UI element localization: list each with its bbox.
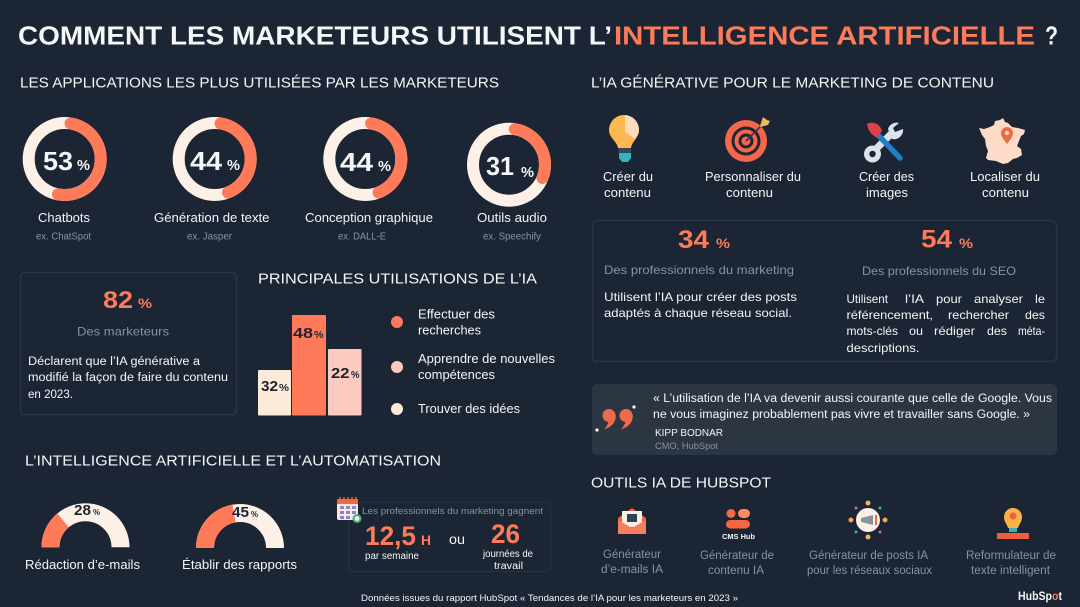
- item: localiser du contenu: Localiser du: [970, 170, 1040, 184]
- panel: statistiques 34% et 54%: des: [987, 324, 1007, 338]
- panel: temps gagné: Les professionnels du marketing gagnent: [362, 506, 543, 517]
- gauge: rédaction d'e-mails 28%: %: [93, 507, 100, 517]
- donut: chatbots 53%: %: [77, 157, 90, 174]
- panel: statistiques 34% et 54%: rechercher: [948, 308, 1009, 322]
- panel: statistiques 34% et 54%: 54: [921, 226, 952, 254]
- donut: génération de texte 44%: 44: [190, 146, 223, 176]
- bar chart: %: [279, 383, 289, 394]
- tool: générateur de contenu: [700, 509, 774, 577]
- heading: automatisation: L’INTELLIGENCE ARTIFICIELLE ET L’AUTOMATISATION: [25, 452, 441, 470]
- donut: outils audio 31%: %: [521, 164, 534, 181]
- icon: france map with pin: [979, 118, 1025, 164]
- panel: statistiques 34% et 54%: descriptions.: [846, 341, 920, 355]
- logo: HubSpot: HubSpot: [1018, 591, 1062, 603]
- icon: CMS Hub logo: CMS Hub: [722, 534, 755, 541]
- panel: citation: ne vous imaginez probablement pas vivre et travailler sans Google. »: [653, 409, 1030, 421]
- donut: chatbots 53%: 53: [43, 146, 73, 176]
- heading: applications: LES APPLICATIONS LES PLUS UTILISÉES PAR LES MARKETEURS: [20, 74, 499, 92]
- panel: statistiques 34% et 54%: %: [959, 235, 974, 251]
- panel: temps gagné: journées de: [482, 549, 533, 560]
- panel: citation: KIPP BODNAR: [655, 428, 723, 439]
- donut: outils audio 31%: [473, 129, 547, 242]
- item: personnaliser du contenu: Personnaliser du: [705, 170, 801, 184]
- panel: statistiques 34% et 54%: pour: [936, 292, 962, 306]
- legend: compétences: [418, 368, 495, 382]
- tool: générateur de contenu: contenu IA: [708, 565, 764, 577]
- donut: conception graphique 44%: %: [378, 158, 391, 175]
- item: créer du contenu: contenu: [604, 186, 651, 200]
- tool: générateur d'e-mails: [601, 508, 663, 576]
- gauge: établir des rapports 45%: 45: [232, 505, 249, 521]
- icon: social network hub: [848, 500, 888, 540]
- tool: générateur de posts: pour les réseaux sociaux: [807, 565, 932, 577]
- gauge: établir des rapports 45%: [182, 505, 297, 572]
- gauge: établir des rapports 45%: Établir des rapports: [182, 557, 297, 572]
- panel: statistiques 34% et 54%: Utilisent l’IA pour créer des posts: [604, 290, 797, 304]
- tool: générateur de posts: Générateur de posts IA: [809, 550, 928, 562]
- panel: statistiques 34% et 54%: rédiger: [934, 324, 975, 338]
- donut: outils audio 31%: ex. Speechify: [483, 232, 541, 242]
- donut: génération de texte 44%: %: [227, 157, 240, 174]
- tool: reformulateur: texte intelligent: [971, 565, 1051, 577]
- legend: Trouver des idées: [418, 402, 520, 416]
- tool: reformulateur: [966, 508, 1056, 577]
- panel: temps gagné: par semaine: [365, 551, 419, 562]
- icon: calendar: [337, 497, 362, 523]
- legend: Apprendre de nouvelles: [418, 352, 555, 366]
- bar chart: %: [314, 330, 324, 341]
- legend: Effectuer des: [418, 308, 495, 322]
- legend: [391, 308, 555, 416]
- gauge: établir des rapports 45%: %: [251, 509, 258, 519]
- donut: chatbots 53%: ex. ChatSpot: [36, 232, 91, 242]
- donut: outils audio 31%: Outils audio: [477, 211, 547, 225]
- panel: statistiques 34% et 54%: Utilisent: [846, 292, 889, 306]
- panel: statistiques 34% et 54%: adaptés à chaque réseau social.: [604, 306, 792, 320]
- panel: statistiques 34% et 54%: Des professionnels du marketing: [604, 263, 794, 277]
- donut: conception graphique 44%: [305, 123, 433, 242]
- panel: statistiques 34% et 54%: l’IA: [905, 292, 924, 306]
- tool: générateur d'e-mails: Générateur: [603, 549, 661, 561]
- bar chart: %: [351, 370, 360, 381]
- icon: envelope: [618, 508, 646, 534]
- icon: bulb on book: [997, 508, 1029, 539]
- donut: génération de texte 44%: ex. Jasper: [187, 232, 233, 242]
- bar chart: 22: [331, 365, 350, 382]
- heading: principales utilisations: PRINCIPALES UTILISATIONS DE L’IA: [258, 270, 537, 288]
- panel: 82% des marketeurs: Des marketeurs: [77, 324, 169, 338]
- panel: statistiques 34% et 54%: 34: [678, 226, 709, 254]
- item: créer des images: [859, 123, 914, 200]
- title: INTELLIGENCE ARTIFICIELLE: [614, 20, 1035, 50]
- bar chart: [258, 315, 362, 416]
- donut: conception graphique 44%: ex. DALL-E: [338, 232, 386, 242]
- heading: IA générative: L’IA GÉNÉRATIVE POUR LE MARKETING DE CONTENU: [591, 74, 994, 92]
- icon: target: [725, 117, 770, 162]
- panel: temps gagné: H: [421, 532, 431, 548]
- panel: 82% des marketeurs: en 2023.: [28, 389, 73, 401]
- tool: générateur de contenu: Générateur de: [700, 550, 774, 562]
- panel: statistiques 34% et 54%: ou: [909, 324, 923, 338]
- panel: statistiques 34% et 54%: %: [716, 235, 731, 251]
- heading: outils IA: OUTILS IA DE HUBSPOT: [591, 474, 771, 492]
- item: créer du contenu: Créer du: [603, 170, 653, 184]
- bar chart: 32: [261, 378, 278, 395]
- gauge: rédaction d'e-mails 28%: [25, 503, 140, 572]
- donut: génération de texte 44%: [154, 123, 270, 242]
- legend: recherches: [418, 324, 481, 338]
- tool: reformulateur: Reformulateur de: [966, 550, 1056, 562]
- panel: 82% des marketeurs: 82: [103, 287, 133, 314]
- donut: conception graphique 44%: 44: [340, 147, 374, 177]
- footer source: Données issues du rapport HubSpot « Tendances de l’IA pour les marketeurs en 2023 »: [361, 593, 738, 604]
- title: ?: [1045, 20, 1058, 50]
- gauge: rédaction d'e-mails 28%: 28: [74, 503, 91, 519]
- donut: conception graphique 44%: Conception graphique: [305, 211, 433, 225]
- icon: wrench and brush: [864, 123, 903, 162]
- panel: citation: « L’utilisation de l’IA va devenir aussi courante que celle de Google. Vous: [653, 393, 1052, 405]
- tool: générateur d'e-mails: d’e-mails IA: [601, 564, 663, 576]
- item: localiser du contenu: [970, 118, 1040, 200]
- item: personnaliser du contenu: contenu: [726, 186, 773, 200]
- panel: temps gagné: [337, 497, 550, 572]
- panel: statistiques 34% et 54%: analyser: [974, 292, 1023, 306]
- icon: quotation marks: [595, 405, 636, 432]
- panel: temps gagné: ou: [449, 531, 465, 547]
- panel: 82% des marketeurs: %: [138, 295, 153, 311]
- panel: 82% des marketeurs: Déclarent que l’IA générative a: [28, 356, 201, 368]
- panel: statistiques 34% et 54%: référencement,: [846, 308, 933, 322]
- title: [18, 20, 1058, 50]
- panel: statistiques 34% et 54%: Des professionnels du SEO: [862, 264, 1016, 278]
- panel: statistiques 34% et 54%: mots-clés: [846, 324, 898, 338]
- panel: temps gagné: 12,5: [365, 521, 416, 551]
- donut: chatbots 53%: [29, 123, 101, 242]
- bar chart: 48: [293, 325, 313, 342]
- panel: temps gagné: 26: [491, 519, 520, 549]
- icon: light bulb: [609, 115, 639, 162]
- item: localiser du contenu: contenu: [982, 186, 1029, 200]
- panel: citation: CMO, HubSpot: [655, 441, 719, 451]
- tool: générateur de posts: [807, 500, 932, 577]
- title: COMMENT LES MARKETEURS UTILISENT L’: [18, 20, 612, 50]
- panel: statistiques 34% et 54%: des: [1025, 308, 1045, 322]
- item: créer des images: images: [866, 186, 908, 200]
- item: personnaliser du contenu: [705, 117, 801, 200]
- donut: chatbots 53%: Chatbots: [38, 211, 90, 225]
- item: créer du contenu: [603, 115, 653, 200]
- donut: outils audio 31%: 31: [486, 151, 514, 181]
- panel: 82% des marketeurs: modifié la façon de faire du contenu: [28, 372, 228, 384]
- gauge: rédaction d'e-mails 28%: Rédaction d’e-mails: [25, 558, 140, 572]
- panel: statistiques 34% et 54%: méta-: [1018, 324, 1045, 338]
- panel: citation: [592, 384, 1057, 455]
- panel: statistiques 34% et 54%: le: [1035, 292, 1045, 306]
- donut: génération de texte 44%: Génération de texte: [154, 211, 270, 225]
- panel: 82% des marketeurs: [20, 272, 236, 414]
- panel: temps gagné: travail: [494, 561, 523, 572]
- item: créer des images: Créer des: [859, 170, 914, 184]
- panel: statistiques 34% et 54%: [592, 220, 1056, 362]
